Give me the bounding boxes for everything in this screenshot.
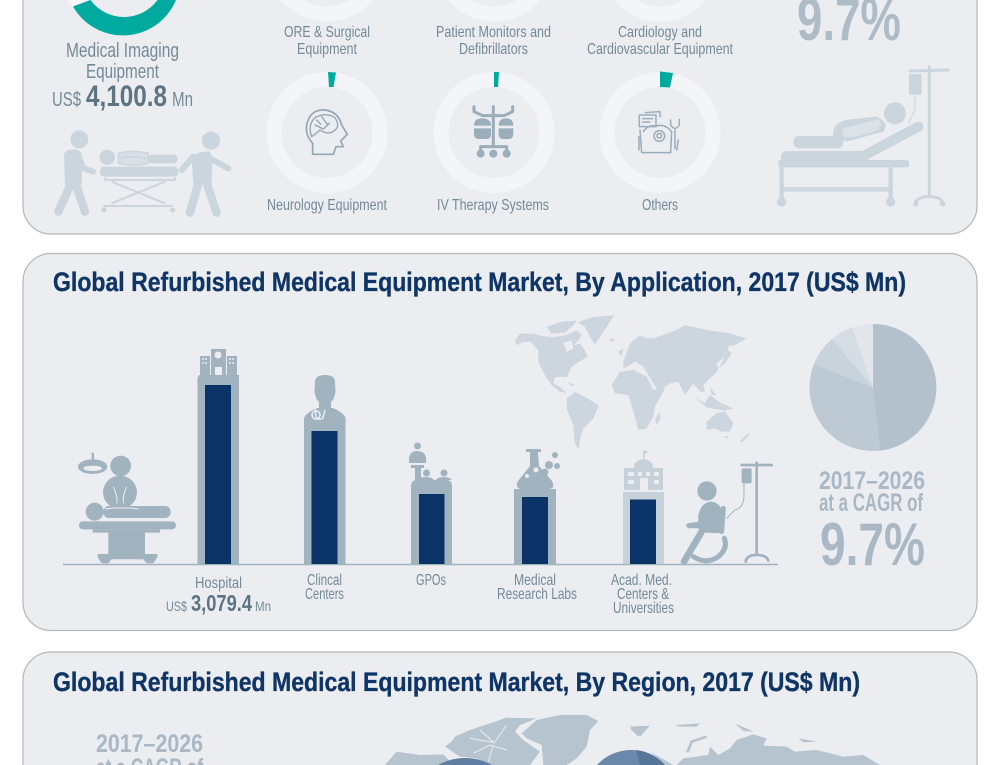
donut: ORE and surgical equipment	[281, 0, 373, 21]
bar: GPOs	[411, 480, 452, 564]
pie chart	[809, 324, 936, 451]
label: medical imaging equipment value: Mn	[172, 89, 193, 111]
bar: academic medical centers and universities	[623, 492, 664, 564]
CAGR callout: at a CAGR of	[819, 489, 923, 517]
map: north polar Americas and Greenland	[385, 715, 640, 765]
label: medical research labs: Research Labs	[497, 586, 577, 603]
map: Eurasia, Africa and Oceania	[612, 325, 749, 443]
label: patient monitors and defibrillators: Patient Monitors and	[436, 24, 551, 41]
map: north polar Russia	[630, 723, 880, 765]
label: clinical centers: Clincal	[307, 572, 342, 589]
label: medical imaging equipment value: US$	[52, 89, 81, 111]
label: medical imaging equipment value	[52, 40, 193, 113]
icon: patient in wheelchair with IV	[684, 463, 772, 562]
label: IV therapy systems: IV Therapy Systems	[437, 197, 549, 214]
donut: patient monitors and defibrillators	[448, 0, 540, 21]
bar: medical research labs	[514, 489, 556, 564]
bar: clinical centers	[304, 408, 346, 564]
icon: IV therapy equipment	[474, 107, 513, 158]
world map, region panel	[385, 715, 880, 765]
icon: university building	[624, 450, 663, 490]
icon: flask	[517, 449, 560, 489]
icon: doctor with stethoscope	[312, 375, 336, 419]
label: neurology equipment: Neurology Equipment	[267, 197, 387, 214]
label: patient monitors and defibrillators	[436, 24, 551, 58]
icon: others medical examination	[639, 112, 679, 153]
label: academic medical centers and universities: Centers &	[617, 586, 669, 603]
label: cardiology equipment: Cardiology and	[618, 24, 702, 41]
label: academic medical centers and universities	[611, 572, 674, 617]
CAGR callout: 2017–2026	[819, 467, 925, 495]
icon: surgeon at operating table	[78, 453, 176, 563]
label: hospital value: 3,079.4	[191, 590, 252, 616]
map: Americas and Greenland	[515, 315, 615, 449]
panel: by equipment type	[23, 0, 977, 234]
label: medical imaging equipment value: 4,100.8	[86, 80, 167, 113]
bubble: region 2	[597, 750, 665, 765]
axis baseline	[63, 564, 778, 566]
label: others: Others	[642, 197, 678, 214]
world map	[515, 315, 749, 449]
icon: group of people	[409, 442, 452, 481]
label: medical imaging equipment value: Medical Imaging	[66, 40, 179, 62]
bar: hospital	[198, 375, 239, 564]
label: ORE and surgical equipment: ORE & Surgical	[284, 24, 370, 41]
label: clinical centers: Centers	[305, 586, 344, 603]
icon: hospital building	[200, 349, 237, 375]
label: hospital value	[166, 575, 271, 616]
label: academic medical centers and universities: Acad. Med.	[611, 572, 672, 589]
label: medical imaging equipment value: Equipment	[86, 61, 159, 83]
label: ORE and surgical equipment: Equipment	[297, 41, 357, 58]
panel: by region	[23, 652, 977, 765]
label: hospital value: Mn	[255, 598, 271, 614]
label: cardiology equipment: Cardiovascular Equipment	[587, 41, 733, 58]
label: GPOs: GPOs	[416, 572, 446, 589]
CAGR callout: 9.7%	[820, 511, 925, 578]
icon: stretcher with two carers	[58, 130, 228, 213]
bubble: region 1	[438, 758, 492, 765]
donut: neurology equipment	[274, 72, 380, 186]
label: hospital value: US$	[166, 598, 187, 614]
label: medical research labs: Medical	[514, 572, 556, 589]
label: academic medical centers and universities: Universities	[613, 600, 674, 617]
icon: brain head	[306, 110, 347, 154]
CAGR callout	[819, 467, 925, 578]
donut: others	[607, 72, 713, 186]
label: hospital value: Hospital	[195, 575, 242, 592]
heading: by region: Global Refurbished Medical Equipment Market, By Region, 2017 (US$ Mn)	[53, 667, 860, 697]
donut: IV therapy systems	[441, 72, 547, 186]
panel: by application	[23, 254, 977, 630]
label: patient monitors and defibrillators: Defibrillators	[459, 41, 528, 58]
icon: patient in bed with IV drip	[777, 67, 948, 207]
CAGR callout, region panel: 2017–2026	[96, 730, 203, 758]
donut: medical imaging equipment	[66, 0, 176, 35]
donut: cardiology equipment	[614, 0, 706, 21]
label: cardiology equipment	[587, 24, 733, 58]
label: ORE and surgical equipment	[284, 24, 370, 58]
label: medical research labs	[497, 572, 577, 603]
label: clinical centers	[305, 572, 344, 603]
